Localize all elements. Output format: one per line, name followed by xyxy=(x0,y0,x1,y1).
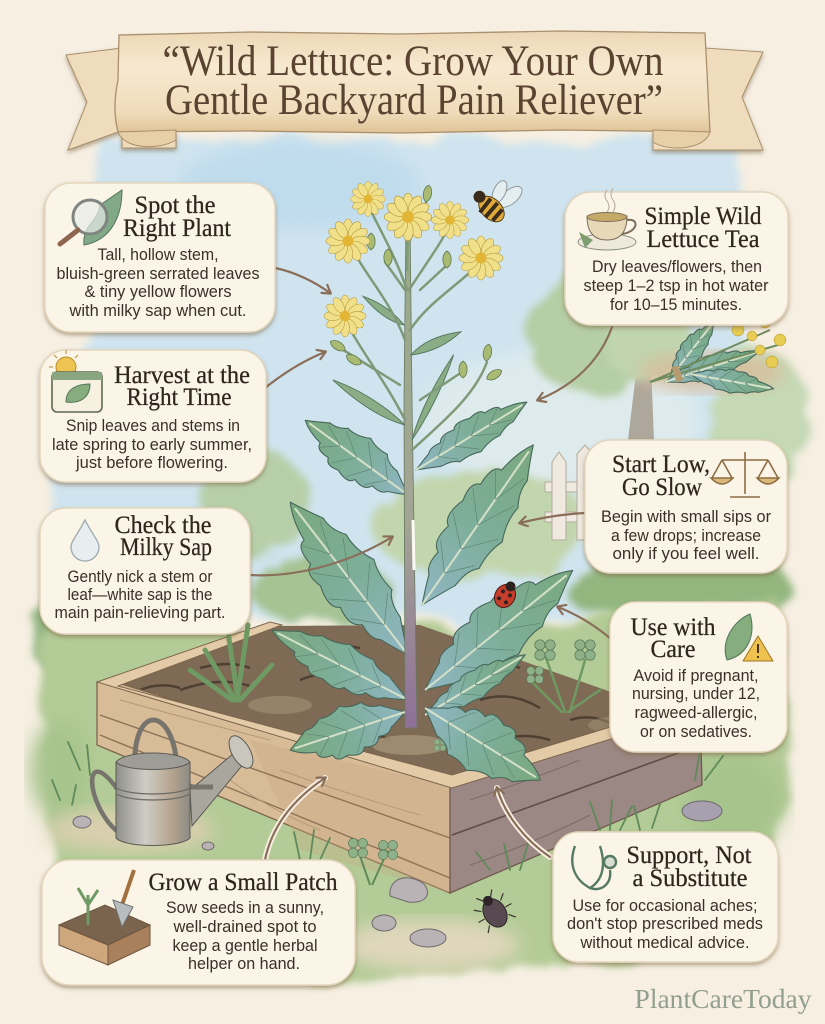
panel: harvest at the right time: Harvest at the xyxy=(114,362,250,389)
panel: start low, go slow: Go Slow xyxy=(622,474,702,501)
main plant xyxy=(262,181,592,807)
ladybug xyxy=(490,577,522,611)
tea bundle xyxy=(638,314,786,401)
panel: start low, go slow xyxy=(585,440,787,573)
icon: leaf and warning xyxy=(725,614,773,661)
panel: check the milky sap: leaf—white sap is the xyxy=(68,586,212,604)
rocks xyxy=(73,801,722,947)
panel: simple wild lettuce tea: for 10–15 minutes. xyxy=(610,296,742,314)
ribbon tails xyxy=(66,48,176,150)
panel: check the milky sap: Gently nick a stem or xyxy=(68,568,213,586)
small stem leaves xyxy=(330,376,407,429)
branches xyxy=(340,200,487,450)
panel: check the milky sap: Check the xyxy=(114,512,212,539)
left face xyxy=(97,682,452,893)
panel: use with care: Use with xyxy=(630,614,716,641)
panel: simple wild lettuce tea xyxy=(565,188,788,325)
arrow: tea xyxy=(538,327,612,400)
panel: spot the right plant: bluish-green serrated leaves xyxy=(56,265,260,283)
panel: start low, go slow: Begin with small sips or xyxy=(601,508,771,526)
panel: start low, go slow: Start Low, xyxy=(612,451,710,478)
panel: spot the right plant: Tall, hollow stem, xyxy=(98,246,218,264)
panel: grow a small patch: keep a gentle herbal xyxy=(172,937,318,955)
tree right xyxy=(628,300,690,440)
panel: harvest at the right time xyxy=(40,350,266,482)
panel: spot the right plant: Right Plant xyxy=(123,215,231,242)
title banner xyxy=(66,31,763,150)
icon: stethoscope xyxy=(572,846,616,889)
fence xyxy=(545,445,600,540)
title banner: Gentle Backyard Pain Reliever” xyxy=(165,77,663,124)
panel: support, not a substitute: Use for occasional aches; xyxy=(572,897,758,915)
arrow: start low xyxy=(520,513,585,523)
panel: simple wild lettuce tea: steep 1–2 tsp in hot water xyxy=(584,277,769,295)
panel: use with care: nursing, under 12, xyxy=(632,685,760,703)
panel: simple wild lettuce tea: Dry leaves/flowers, then xyxy=(592,258,762,276)
soil xyxy=(100,625,705,775)
icon: water drop xyxy=(71,520,99,561)
panel: use with care: Care xyxy=(650,636,696,663)
icon: calendar and sun xyxy=(49,350,102,412)
clover and grass tufts xyxy=(52,742,723,885)
sky wash xyxy=(55,140,770,620)
panel: harvest at the right time: Snip leaves and stems in xyxy=(66,417,240,435)
icon: tea cup xyxy=(578,188,636,250)
panel: support, not a substitute: without medical advice. xyxy=(580,934,750,952)
panel: use with care: ragweed-allergic, xyxy=(634,704,758,722)
panel: start low, go slow: a few drops; increase xyxy=(611,527,761,545)
seedling plants in bed xyxy=(190,625,600,751)
panel: grow a small patch xyxy=(42,860,355,985)
panel: spot the right plant: with milky sap when cut. xyxy=(69,302,246,320)
tree left xyxy=(200,450,310,560)
panel: grow a small patch: Sow seeds in a sunny, xyxy=(166,899,324,917)
panel: use with care xyxy=(610,602,787,752)
grass ground xyxy=(30,600,790,990)
panel: grow a small patch: helper on hand. xyxy=(188,955,300,973)
panel: spot the right plant: Spot the xyxy=(134,192,216,219)
panel: simple wild lettuce tea: Lettuce Tea xyxy=(646,226,760,253)
flowers xyxy=(384,193,432,241)
panel: simple wild lettuce tea: Simple Wild xyxy=(644,203,762,230)
panel: support, not a substitute xyxy=(553,832,778,962)
panel: harvest at the right time: just before flowering. xyxy=(75,454,228,472)
icon: planter box and trowel xyxy=(59,870,150,965)
background trees xyxy=(30,273,810,695)
panel: use with care: Avoid if pregnant, xyxy=(634,667,758,685)
title: “Wild Lettuce: Grow Your Own xyxy=(162,38,664,85)
top rim xyxy=(97,622,702,788)
arrow: harvest xyxy=(265,352,325,388)
panel: use with care: or on sedatives. xyxy=(640,723,752,741)
panel: check the milky sap: Milky Sap xyxy=(120,534,212,561)
panel: check the milky sap: main pain-relieving part. xyxy=(54,604,226,622)
panel: grow a small patch: Grow a Small Patch xyxy=(148,869,338,896)
panel: start low, go slow: only if you feel well. xyxy=(612,545,760,563)
panel: harvest at the right time: late spring to early summer, xyxy=(52,436,252,454)
panel: spot the right plant: & tiny yellow flowers xyxy=(84,283,232,301)
arrow: support xyxy=(497,788,550,857)
stem xyxy=(404,215,417,728)
icon: magnifier and leaf xyxy=(60,190,122,245)
panel: spot the right plant xyxy=(45,183,275,332)
panel: support, not a substitute: Support, Not xyxy=(626,842,752,869)
icon: balance scale xyxy=(711,452,779,497)
watermark: PlantCareToday xyxy=(634,984,812,1014)
raised garden bed xyxy=(97,622,705,893)
beetle xyxy=(468,884,519,935)
panel: harvest at the right time: Right Time xyxy=(126,384,232,411)
hills xyxy=(370,470,590,580)
buds xyxy=(422,184,433,203)
ribbon main xyxy=(115,31,710,133)
panel: check the milky sap xyxy=(40,508,250,634)
right face xyxy=(450,700,702,893)
arrow: spot the plant xyxy=(275,268,330,293)
panel: support, not a substitute: a Substitute xyxy=(632,865,748,892)
watering can xyxy=(92,720,258,846)
lower leaves xyxy=(266,483,433,674)
arrow: milky sap xyxy=(250,537,392,575)
panel: grow a small patch: well-drained spot to xyxy=(173,918,316,936)
bee xyxy=(465,168,528,232)
arrow: grow a patch xyxy=(265,778,325,860)
panel: support, not a substitute: don't stop prescribed meds xyxy=(567,915,763,933)
arrow: use with care xyxy=(558,607,612,640)
